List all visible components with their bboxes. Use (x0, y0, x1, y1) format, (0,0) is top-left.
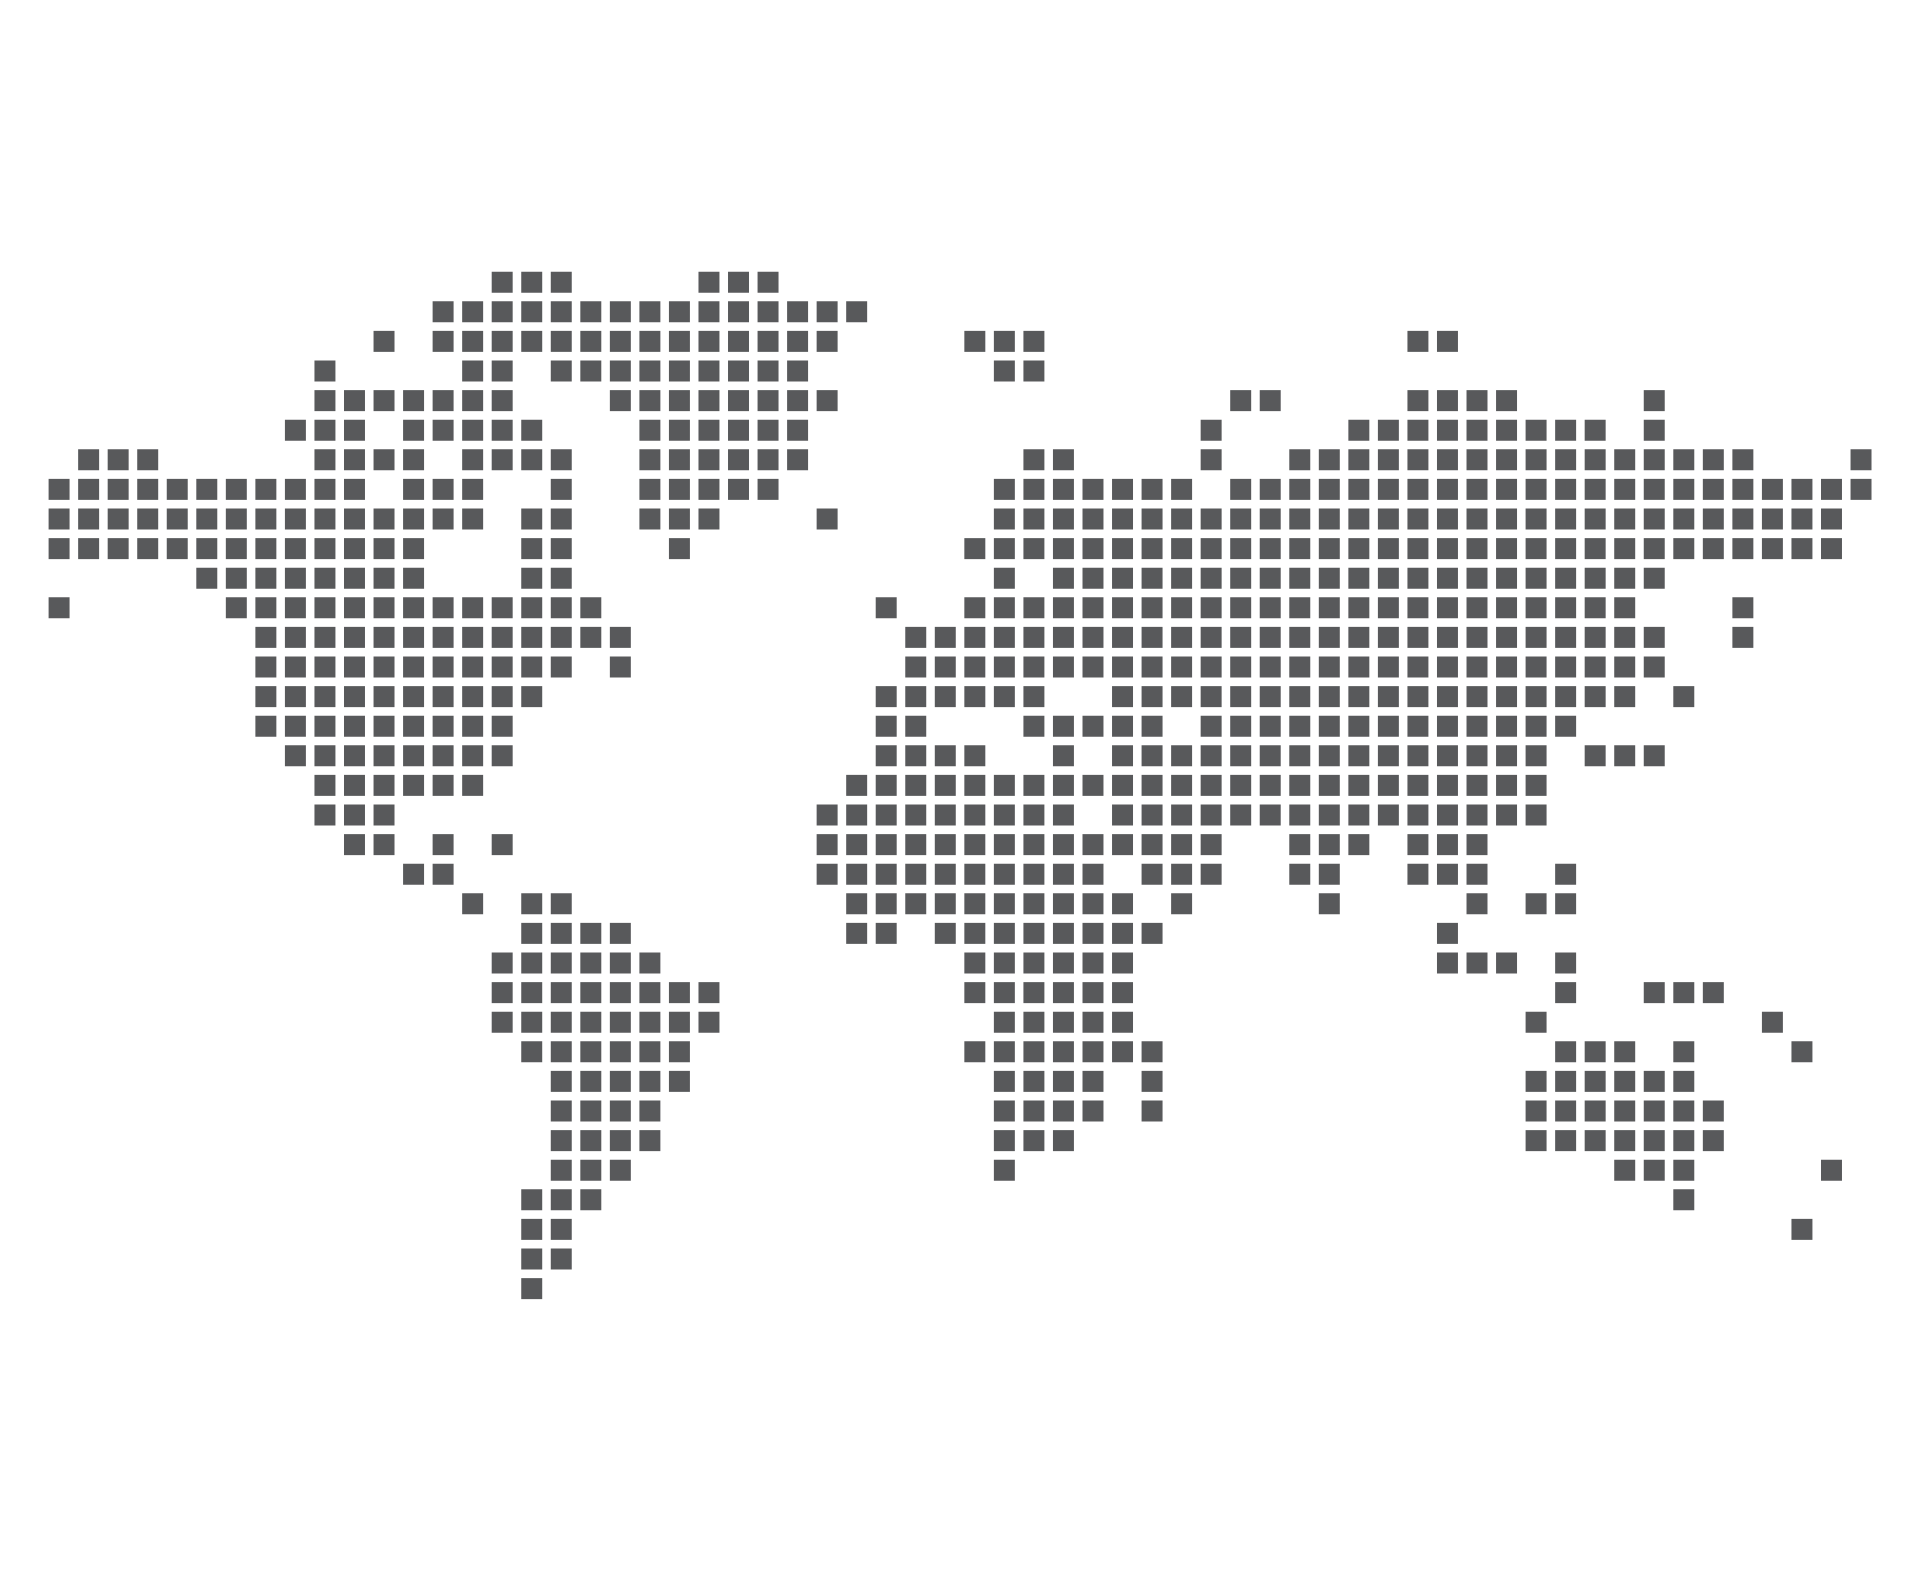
north america and greenland (49, 282, 876, 904)
south america (492, 904, 728, 1289)
australia and oceania (1437, 933, 1851, 1229)
europe, asia and africa (817, 341, 1880, 1170)
